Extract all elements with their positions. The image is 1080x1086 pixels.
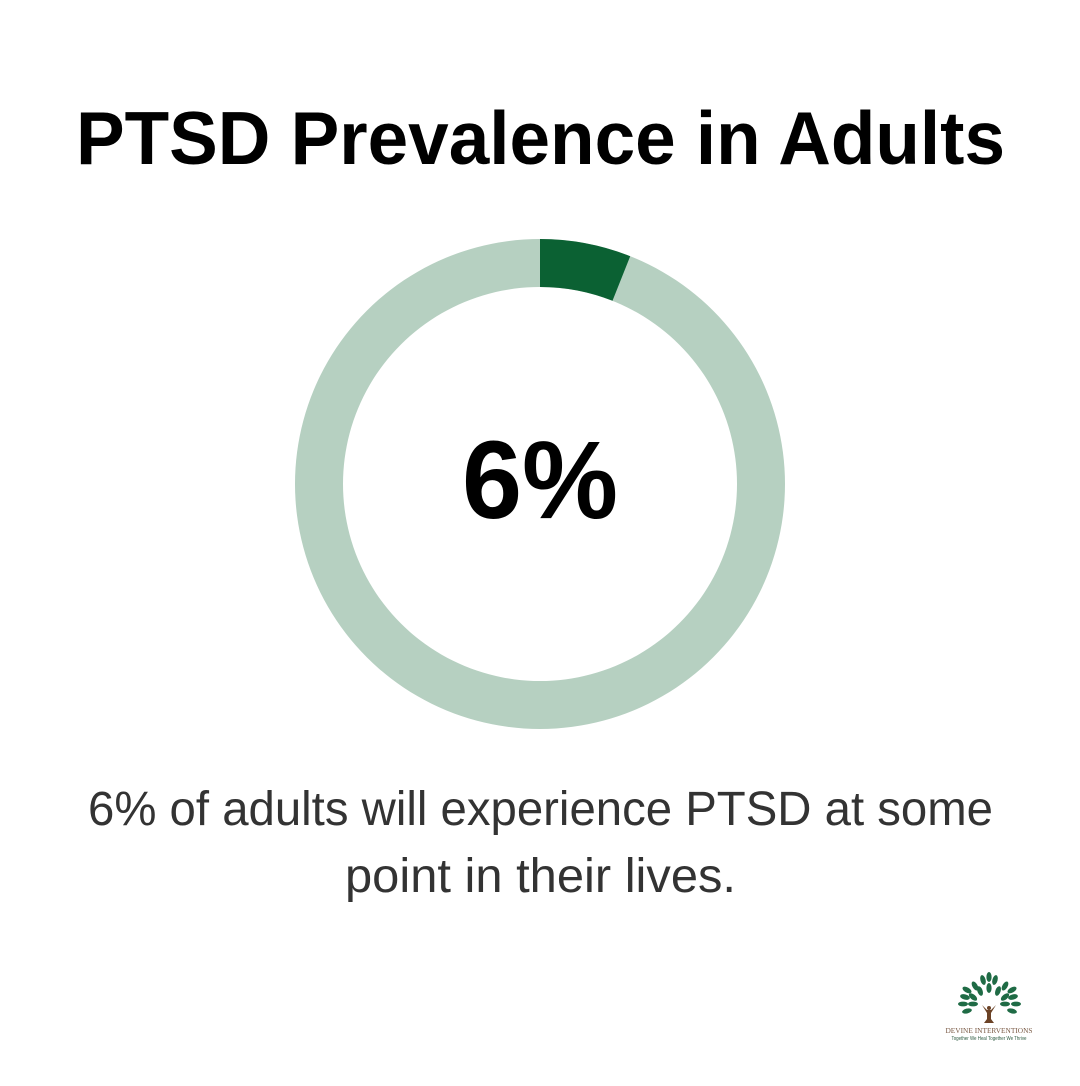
icon: tree figure xyxy=(982,1005,996,1023)
ring: remaining 94% xyxy=(295,239,785,729)
logo tagline: Together We Heal Together We Thrive xyxy=(952,1036,1027,1042)
description text: 6% of adults will experience PTSD at some xyxy=(88,783,993,836)
icon: tree leaves xyxy=(958,972,1021,1015)
description text xyxy=(88,783,993,903)
description text: point in their lives. xyxy=(345,850,736,903)
title: PTSD Prevalence in Adults xyxy=(76,96,1005,180)
ring: highlighted 6% xyxy=(540,239,630,301)
center value: 6% xyxy=(462,419,618,542)
donut chart xyxy=(295,239,785,729)
logo: Devine Interventions xyxy=(946,972,1032,1042)
logo name: DEVINE INTERVENTIONS xyxy=(946,1026,1032,1035)
